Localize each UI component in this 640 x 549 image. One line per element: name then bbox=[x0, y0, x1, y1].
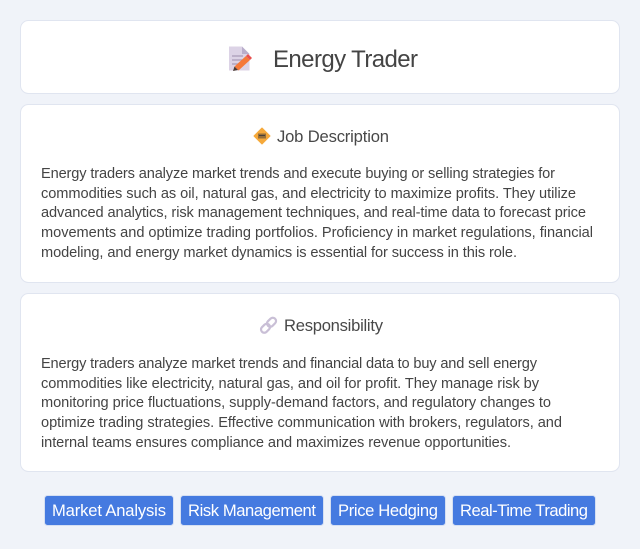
tag: risk management bbox=[180, 496, 324, 526]
text block: responsibility bbox=[41, 356, 562, 451]
text block: job description: advanced analytics, risk management techniques, and real-time data to forecast price bbox=[41, 205, 586, 221]
text block: responsibility: internal teams ensures compliance and maximizes revenue opportunities. bbox=[41, 435, 511, 451]
tag: market analysis: Market Analysis bbox=[52, 501, 166, 520]
text block: job description: Energy traders analyze market trends and execute buying or selling strategies for bbox=[41, 166, 555, 182]
tag: price hedging: Price Hedging bbox=[338, 501, 438, 520]
text block: job description: commodities such as oil, natural gas, and electricity to maximize profits. They utilize bbox=[41, 186, 576, 202]
tag: market analysis bbox=[44, 496, 174, 526]
text block: responsibility: commodities like electricity, natural gas, and oil for profit. They manage risk by bbox=[41, 376, 540, 392]
title: Energy Trader bbox=[273, 46, 418, 73]
tag row bbox=[44, 496, 596, 526]
tag: real-time trading: Real-Time Trading bbox=[460, 501, 588, 520]
header panel bbox=[20, 20, 620, 94]
text block: job description: movements and optimize trading portfolios. Proficiency in market regulations, financial bbox=[41, 225, 593, 241]
text block: responsibility: monitoring price fluctuations, supply-demand factors, and regulatory changes to bbox=[41, 395, 551, 411]
text block: job description: modeling, and energy market dynamics is essential for success in this role. bbox=[41, 245, 517, 261]
text block: responsibility: optimize trading strategies. Effective communication with brokers, regulators, and bbox=[41, 415, 562, 431]
heading: job description: Job Description bbox=[277, 127, 389, 146]
text block: responsibility: Energy traders analyze market trends and financial data to buy and sell energy bbox=[41, 356, 538, 372]
tag: risk management: Risk Management bbox=[188, 501, 316, 520]
tag: real-time trading bbox=[452, 496, 596, 526]
panel: job description bbox=[20, 104, 620, 282]
heading: responsibility: Responsibility bbox=[284, 316, 384, 335]
text block: job description bbox=[41, 166, 593, 261]
icon: document with pencil bbox=[229, 46, 252, 71]
icon: orange diamond sign bbox=[254, 128, 270, 144]
panel: responsibility bbox=[20, 294, 620, 472]
tag: price hedging bbox=[330, 496, 446, 526]
icon: chain link bbox=[260, 316, 277, 334]
